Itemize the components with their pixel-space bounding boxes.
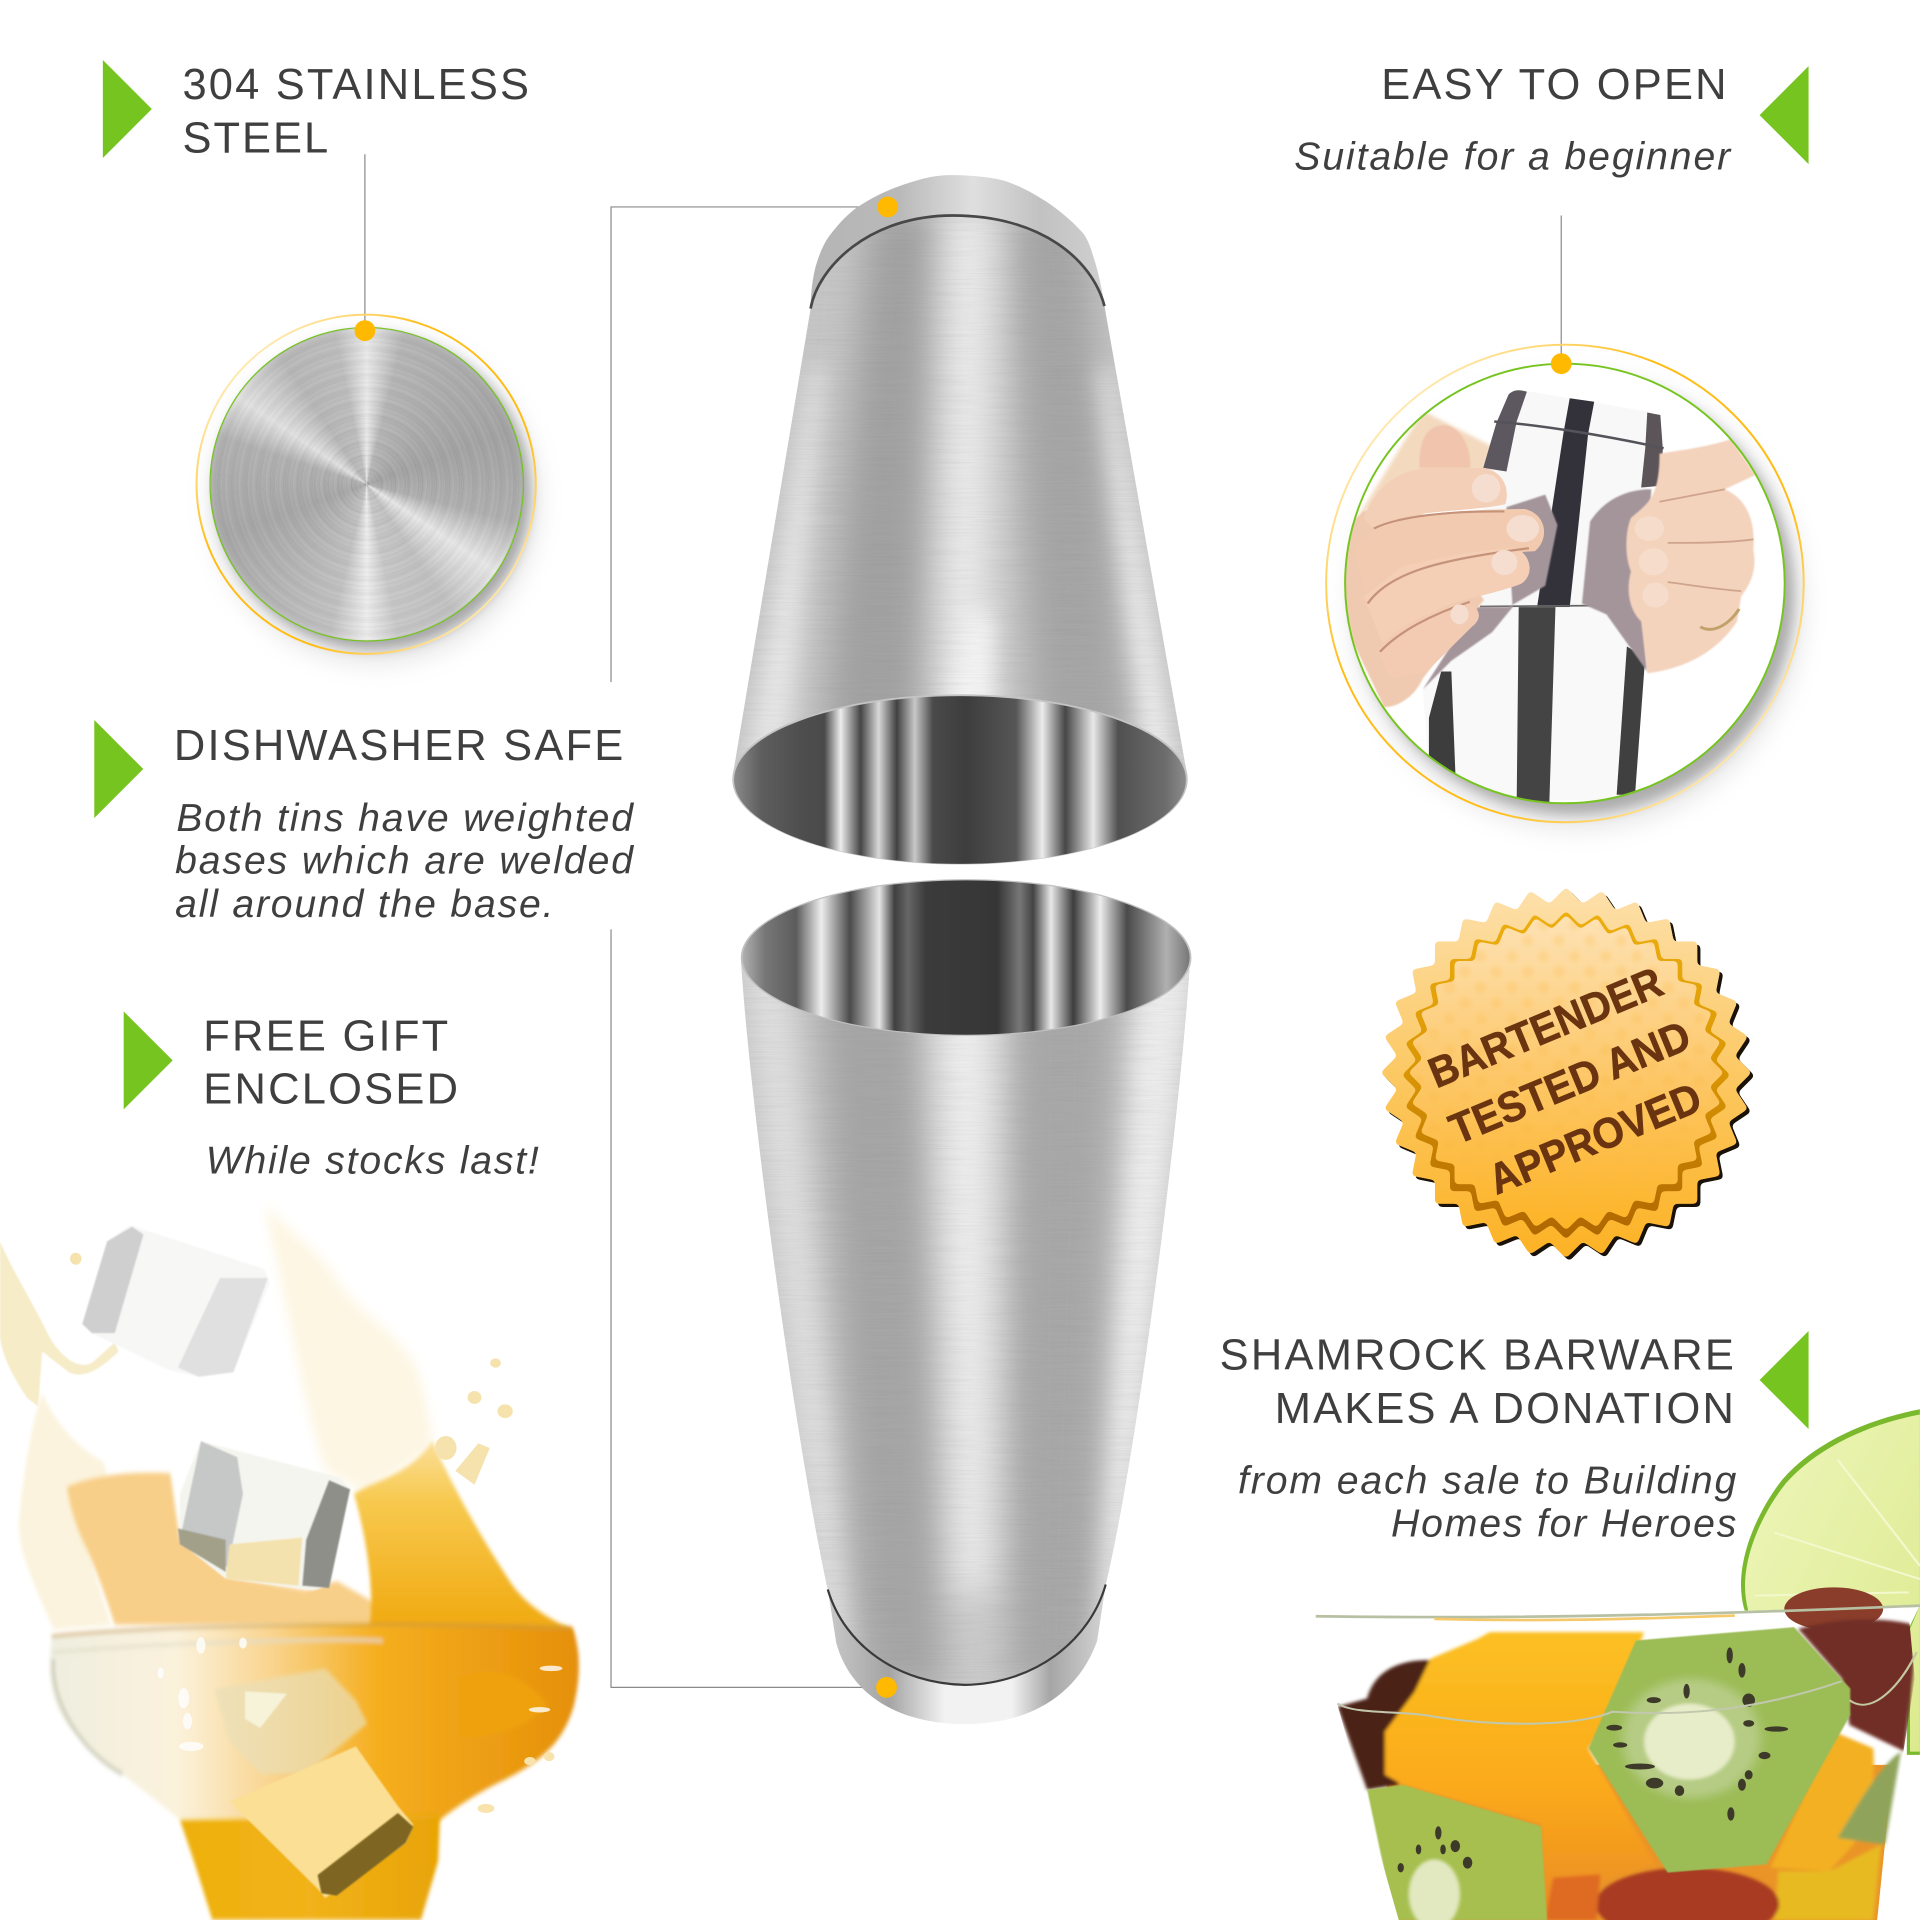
left hand bbox=[1341, 425, 1544, 707]
splashes on bowl surface bbox=[478, 1752, 554, 1813]
orange segment right bbox=[1770, 1732, 1874, 1871]
yellow lower right bbox=[1774, 1844, 1881, 1920]
pale splash rising on the right bbox=[264, 1205, 432, 1494]
brushed texture bbox=[942, 334, 1176, 722]
bottom tin connector dot bbox=[876, 1677, 897, 1698]
left palm bbox=[1341, 511, 1484, 707]
glass contents bbox=[1337, 1620, 1917, 1920]
green arrow: 304 stainless steel bbox=[103, 60, 152, 158]
reflection shadows on tin bbox=[1423, 489, 1651, 689]
falling ice cube bbox=[82, 1225, 270, 1377]
badge inner face bbox=[1410, 916, 1722, 1229]
upper tin bbox=[1480, 390, 1664, 607]
panel: brushed steel disc bbox=[197, 315, 541, 666]
left forearm bbox=[1358, 411, 1492, 518]
heading: easy to open: EASY TO OPEN bbox=[1381, 61, 1727, 109]
badge wording bbox=[1422, 958, 1708, 1204]
disc brushed metal bbox=[209, 327, 524, 642]
top tin interior bbox=[734, 696, 1186, 864]
text: dishwasher description bbox=[175, 797, 634, 926]
red grape bottom bbox=[1596, 1868, 1779, 1920]
kiwi slice large bbox=[1589, 1627, 1850, 1873]
left fingers bbox=[1366, 468, 1507, 514]
big orange segment bbox=[1382, 1629, 1650, 1860]
disc connector dot bbox=[354, 320, 375, 341]
top tin cap bbox=[811, 175, 1104, 309]
badge wording: TESTED AND bbox=[1443, 1012, 1697, 1154]
right maroon grape bbox=[1798, 1620, 1917, 1752]
top tin body bbox=[722, 208, 1200, 784]
heading: 304 stainless steel bbox=[182, 61, 529, 162]
badge: bartender tested and approved bbox=[1382, 888, 1754, 1260]
lower tin bbox=[1423, 605, 1645, 804]
glass stem with juice bbox=[180, 1815, 440, 1920]
left thumb tip bbox=[1419, 425, 1470, 468]
ice cubes inside the glass bbox=[214, 1668, 413, 1898]
leader line to hands photo bbox=[1560, 216, 1562, 361]
bottom tin rim bbox=[741, 879, 1191, 1036]
green arrow: shamrock barware bbox=[1760, 1331, 1809, 1429]
heading: shamrock barware donation: SHAMROCK BARWARE bbox=[1220, 1332, 1734, 1380]
dark grape left bbox=[1337, 1660, 1434, 1790]
main yellow juice mass bbox=[354, 1441, 572, 1641]
right hand bbox=[1626, 439, 1755, 673]
photo soft halo bbox=[1348, 373, 1806, 831]
badge rim bbox=[1404, 912, 1729, 1238]
badge wording: BARTENDER bbox=[1422, 958, 1670, 1098]
heading: 304 stainless steel: 304 STAINLESS bbox=[182, 61, 529, 109]
badge outer seal bbox=[1382, 888, 1750, 1257]
badge wording: APPROVED bbox=[1482, 1074, 1708, 1204]
photo green ring bbox=[1345, 364, 1785, 803]
green arrow: easy to open bbox=[1760, 66, 1809, 164]
photo: juice splash in glass with ice bbox=[0, 1205, 579, 1920]
photo white background bbox=[1344, 363, 1785, 804]
middle ice cube bbox=[178, 1441, 350, 1590]
text: donation description: from each sale to Building bbox=[1238, 1459, 1737, 1502]
disc soft halo bbox=[208, 333, 541, 666]
juice droplets bbox=[70, 1253, 513, 1485]
heading: free gift enclosed bbox=[203, 1013, 458, 1113]
badge black edge shadow bbox=[1386, 892, 1754, 1260]
heading: dishwasher safe: DISHWASHER SAFE bbox=[174, 722, 623, 770]
green arrow: free gift bbox=[124, 1011, 173, 1109]
photo: fruit salad glass with lime bbox=[1316, 1409, 1920, 1920]
leader line to steel disc bbox=[364, 154, 366, 328]
glass rim and lip bbox=[1316, 1606, 1920, 1724]
heading: shamrock barware donation: MAKES A DONATION bbox=[1275, 1385, 1734, 1433]
bottom tin ridge bbox=[828, 1584, 1106, 1685]
text: dishwasher description: Both tins have weighted bbox=[176, 797, 634, 840]
photo orange ring bbox=[1326, 345, 1804, 822]
lime slice bbox=[1741, 1409, 1920, 1755]
bottom tin base bbox=[828, 1584, 1106, 1724]
photo contents bbox=[1341, 390, 1755, 804]
heading: 304 stainless steel: STEEL bbox=[182, 114, 328, 162]
orange slosh behind the ice cube bbox=[67, 1473, 379, 1625]
glass base colour bbox=[1385, 1765, 1893, 1920]
glass bowl bbox=[50, 1623, 579, 1820]
red lower left bbox=[1545, 1874, 1600, 1920]
far-left streak of juice bbox=[0, 1241, 119, 1407]
brushed texture bbox=[779, 979, 1188, 1562]
photo connector dot bbox=[1551, 353, 1572, 374]
grape behind rim bbox=[1784, 1587, 1883, 1631]
leader bracket: top tin bbox=[611, 207, 888, 682]
heading: free gift enclosed: FREE GIFT bbox=[203, 1013, 448, 1061]
bottom tin interior bbox=[743, 880, 1190, 1035]
left clear splash bbox=[19, 1393, 111, 1629]
photo shadow bbox=[1356, 376, 1794, 814]
text: donation description: Homes for Heroes bbox=[1391, 1503, 1736, 1546]
panel: hands opening the shaker bbox=[1326, 345, 1806, 831]
text: dishwasher description: bases which are welded bbox=[175, 840, 634, 883]
note: suitable for a beginner: Suitable for a beginner bbox=[1294, 136, 1732, 179]
bottom tin body bbox=[735, 949, 1200, 1696]
text: donation description bbox=[1238, 1459, 1737, 1546]
shaker: bottom tin bbox=[735, 879, 1200, 1724]
disc drop shadow bbox=[217, 336, 530, 649]
note: while stocks last: While stocks last! bbox=[206, 1140, 539, 1183]
text: dishwasher description: all around the base. bbox=[175, 883, 553, 926]
shaker: top tin bbox=[722, 175, 1200, 864]
top tin ridge bbox=[811, 216, 1104, 309]
heading: shamrock barware donation bbox=[1220, 1332, 1734, 1433]
top tin rim bbox=[732, 694, 1188, 864]
green reflection right bbox=[1838, 1752, 1901, 1844]
leader bracket: bottom tin bbox=[611, 929, 887, 1687]
droplets on the glass bbox=[158, 1637, 562, 1751]
heading: free gift enclosed: ENCLOSED bbox=[203, 1065, 458, 1113]
green arrow: dishwasher safe bbox=[94, 720, 143, 818]
disc orange ring bbox=[197, 315, 536, 654]
top tin connector dot bbox=[877, 197, 898, 217]
kiwi slice small bbox=[1367, 1785, 1547, 1920]
